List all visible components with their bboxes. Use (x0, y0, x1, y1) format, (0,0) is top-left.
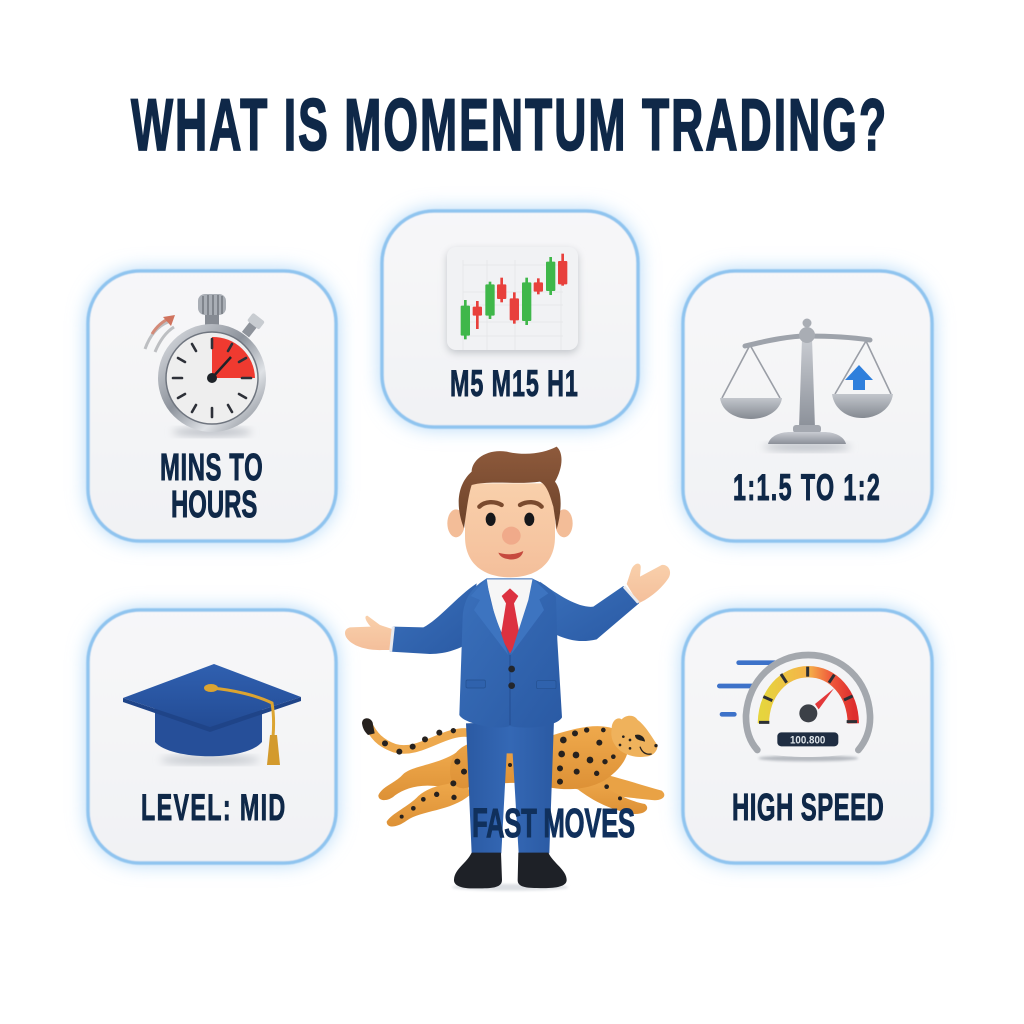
hand left (345, 616, 393, 650)
jacket (459, 578, 562, 728)
left sleeve (390, 583, 477, 654)
hand right (627, 564, 670, 603)
right sleeve (540, 582, 639, 641)
label: hours: HOURS (171, 482, 257, 525)
lapels (471, 578, 548, 655)
label: ratio: 1:1.5 TO 1:2 (733, 466, 880, 508)
panel: level (88, 610, 336, 863)
nose (502, 527, 521, 545)
label: level mid: LEVEL: MID (141, 786, 285, 828)
ears (447, 509, 465, 537)
panel: risk reward (683, 271, 932, 541)
tie (501, 588, 520, 653)
icon: stopwatch (145, 294, 266, 436)
face (465, 483, 555, 577)
icon: candlestick chart (447, 247, 578, 353)
panel: mins to hours (88, 271, 336, 541)
illustration: businessman (345, 447, 670, 891)
eyes (486, 513, 496, 526)
illustration: cheetah (362, 716, 664, 827)
pockets and buttons (466, 680, 485, 688)
eyebrows (479, 502, 542, 507)
trousers (466, 720, 554, 853)
label: mins to: MINS TO (160, 445, 263, 488)
icon: balance scale (720, 318, 893, 451)
panel: high speed (683, 610, 932, 863)
icon: graduation cap (123, 664, 301, 765)
label: high speed: HIGH SPEED (732, 785, 884, 828)
shirt (486, 579, 533, 653)
panel: timeframes (382, 211, 638, 427)
icon: speedometer (719, 655, 870, 761)
icon: speedometer: 100.800 (790, 734, 825, 746)
mouth (498, 551, 523, 559)
label: M5 M15 H1: M5 M15 H1 (450, 362, 578, 404)
title: WHAT IS MOMENTUM TRADING? (131, 84, 886, 166)
shoes (454, 853, 567, 888)
label: fast moves: FAST MOVES (472, 801, 635, 847)
hair (459, 447, 562, 529)
